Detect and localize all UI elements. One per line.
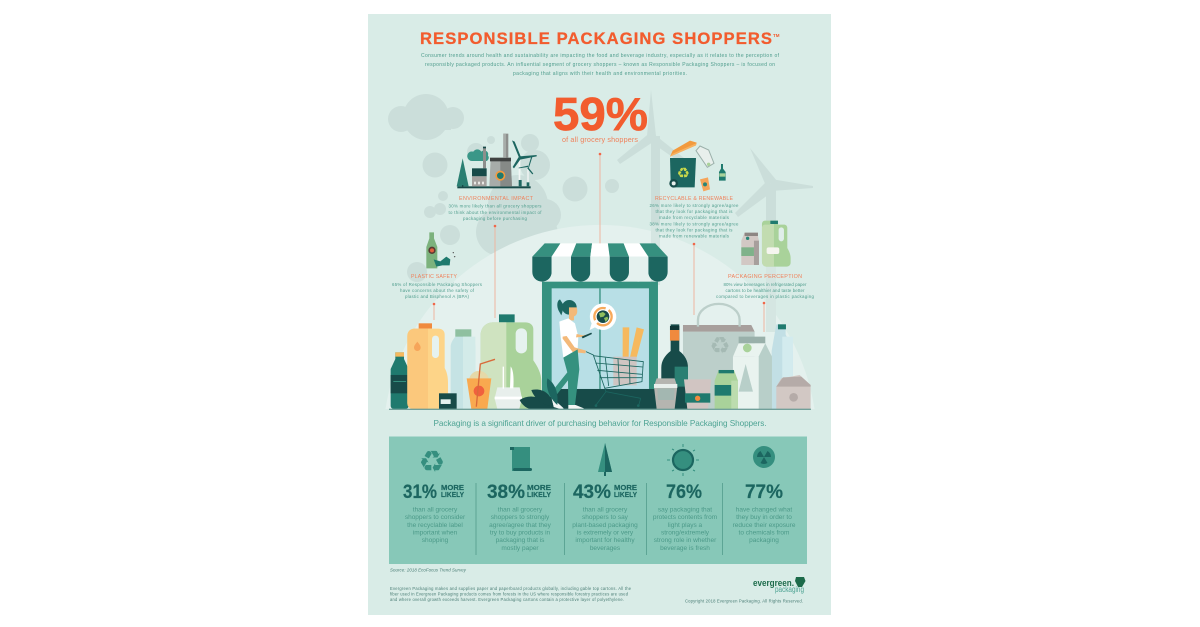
stat text: column 2: shoppers to strongly [491, 514, 550, 521]
stat text: column 4: light plays a [668, 522, 703, 529]
stat text: column 3: beverages [590, 545, 621, 552]
stat: 31% more likely: 31% [403, 481, 437, 503]
stat text: column 1: shopping [422, 537, 449, 544]
stat: 38% more likely [487, 481, 551, 503]
footer disclaimer: and where overall growth exceeds harvest. Evergreen Packaging cartons contain a protective layer of polyethylene. [390, 597, 624, 602]
stat text: column 3: is extremely or very [577, 530, 634, 536]
stat: 38% more likely: MORE [527, 483, 551, 492]
stat text: column 1: than all grocery [413, 506, 458, 514]
source note: Source: 2018 EcoFocus Trend Survey [390, 568, 467, 572]
copyright: Copyright 2018 Evergreen Packaging. All Rights Reserved. [685, 598, 803, 604]
panel: poster background [368, 14, 831, 615]
callout: recyclable and renewable: 26% more likely to strongly agree/agree [650, 203, 739, 208]
stat text: column 3: shoppers to say [582, 514, 629, 521]
right packaging group: ♻ [710, 331, 730, 359]
intro paragraph [421, 53, 780, 77]
stat text: column 5: they buy in order to [736, 514, 792, 521]
icon: paper scroll [510, 447, 532, 471]
stat: 38% more likely: LIKELY [527, 490, 551, 499]
icon: recycle: ♻ [419, 445, 445, 480]
icon: recycling bin [669, 141, 726, 191]
callout: recyclable and renewable: made from renewable materials [659, 234, 730, 238]
title: RESPONSIBLE PACKAGING SHOPPERS [420, 29, 772, 48]
stat text: column 2: try to buy products in [490, 530, 551, 536]
stat text: column 5: reduce their exposure [733, 522, 796, 529]
stat: 31% more likely: LIKELY [441, 490, 464, 499]
stat text: column 3: important for healthy [575, 537, 635, 544]
plant leaves [520, 378, 558, 409]
stat text: column 2: than all grocery [498, 506, 543, 514]
stat text: column 2: packaging that is [496, 537, 545, 544]
ground line [389, 409, 811, 410]
icon: recycling bin: ♻ [677, 165, 690, 182]
stat text: column 4: say packaging that [658, 506, 712, 514]
icon: tree [598, 443, 612, 476]
stat text: column 2 [489, 506, 552, 552]
stat text: column 4: strong role in whether [654, 537, 717, 544]
callout: environmental impact: packaging before purchasing [463, 216, 528, 221]
stat text: column 1: important when [413, 530, 458, 536]
stat text: column 5: to chemicals from [739, 530, 789, 536]
callout: environmental impact: ENVIRONMENTAL IMPACT [459, 196, 534, 202]
callout: recyclable and renewable: that they look for packaging that is [656, 228, 733, 232]
stat: 43% more likely: 43% [573, 481, 611, 503]
background: clouds and smoke [388, 94, 619, 282]
footer disclaimer: Evergreen Packaging makes and supplies paper and paperboard products globally, including gable top cartons. All the [390, 586, 632, 591]
stat: 77%: 77% [745, 481, 783, 503]
stat: 31% more likely [403, 481, 464, 503]
left packaging group [391, 314, 541, 409]
callout: plastic safety: plastic and Bisphenol A (BPA) [405, 294, 470, 299]
pointer lines [433, 153, 765, 332]
illustration: storefront scene and packaging [389, 221, 811, 410]
shopping cart with baguettes [586, 327, 644, 407]
callout: recyclable and renewable [650, 196, 739, 238]
callout: recyclable and renewable: made from recyclable materials [659, 215, 730, 220]
stat text: column 1: shoppers to consider [405, 514, 466, 521]
stat text: column 5 [733, 506, 796, 544]
stat text: column 1: the recyclable label [407, 522, 463, 529]
stat text: column 3: plant-based packaging [572, 522, 638, 529]
intro paragraph: packaging that aligns with their health and environmental priorities. [513, 71, 687, 77]
callout: recyclable and renewable: 38% more likely to strongly agree/agree [650, 222, 739, 226]
stat: 43% more likely: LIKELY [614, 490, 637, 499]
callout: plastic safety: PLASTIC SAFETY [411, 274, 458, 280]
callout: plastic safety: have concerns about the safety of [400, 288, 475, 293]
background: wind turbines [617, 90, 813, 334]
callout: plastic safety: 65% of Responsible Packaging Shoppers [392, 282, 483, 287]
footer disclaimer [390, 586, 632, 602]
stat: 38% more likely: 38% [487, 481, 525, 503]
intro paragraph: Consumer trends around health and sustainability are impacting the food and beverage industry, especially as it relates to the perception of [421, 53, 780, 59]
stat text: column 5: packaging [749, 537, 779, 544]
logo: Evergreen Packaging: evergreen. [753, 578, 794, 588]
stat text: column 4: strong/extremely [661, 530, 710, 536]
logo: Evergreen Packaging: packaging [775, 585, 804, 594]
stat text: column 1 [405, 506, 466, 544]
stat: 31% more likely: MORE [441, 483, 464, 492]
stat text: column 4 [653, 506, 717, 552]
icon: plastic bottle with fish [426, 232, 455, 268]
callout: environmental impact: 30% more likely than all grocery shoppers [448, 204, 542, 208]
callout: environmental impact: to think about the environmental impact of [448, 210, 542, 215]
stat text: column 4: beverage is fresh [660, 545, 710, 552]
stat text: column 3 [572, 506, 638, 552]
callout: recyclable and renewable: that they look for packaging that is [656, 209, 733, 214]
callout: packaging perception: compared to beverages in plastic packaging [716, 294, 815, 299]
logo: Evergreen Packaging [753, 577, 806, 594]
stat text: column 4: protects contents from [653, 514, 717, 521]
callout: environmental impact [448, 196, 542, 221]
icon: globe speech bubble [590, 303, 616, 330]
panel: statistics band [389, 436, 807, 564]
stat text: column 5: have changed what [736, 506, 792, 514]
callout: packaging perception [716, 274, 815, 299]
callout: plastic safety [392, 274, 483, 299]
column dividers [476, 483, 723, 555]
callout: packaging perception: cartons to be healthier and taste better [726, 288, 805, 293]
stat text: column 2: agree/agree that they [489, 522, 552, 529]
stat: 76%: 76% [666, 481, 702, 503]
subheading: Packaging is a significant driver of purchasing behavior for Responsible Packaging Shoppers. [434, 419, 766, 428]
callout: recyclable and renewable: RECYCLABLE & RENEWABLE [655, 196, 734, 202]
stat text: column 2: mostly paper [501, 545, 539, 552]
headline statistic: 59%: 59% [553, 88, 648, 140]
intro paragraph: responsibly packaged products. An influential segment of grocery shoppers – known as Responsible Packaging Shoppers – is focused on [425, 62, 775, 68]
stat text: column 3: than all grocery [583, 506, 628, 514]
background: light dome [386, 225, 814, 409]
callout: packaging perception: 80% view beverages in refrigerated paper [724, 282, 807, 287]
callout: packaging perception: PACKAGING PERCEPTION [728, 274, 802, 280]
footer disclaimer: fiber used in Evergreen Packaging products comes from forests in the US where responsible forestry practices are used [390, 591, 629, 596]
stat: 43% more likely: MORE [614, 483, 637, 492]
storefront [532, 243, 668, 410]
icon: factory with turbines [457, 134, 537, 188]
icon: sun [667, 444, 699, 476]
right packaging group [654, 304, 811, 409]
headline caption: of all grocery shoppers [562, 135, 638, 144]
shopper figure [549, 299, 592, 410]
trademark: TM [773, 33, 780, 38]
icon: carton and jug with cow [741, 221, 791, 267]
stat: 43% more likely [573, 481, 637, 503]
icon: radiation [753, 446, 775, 468]
